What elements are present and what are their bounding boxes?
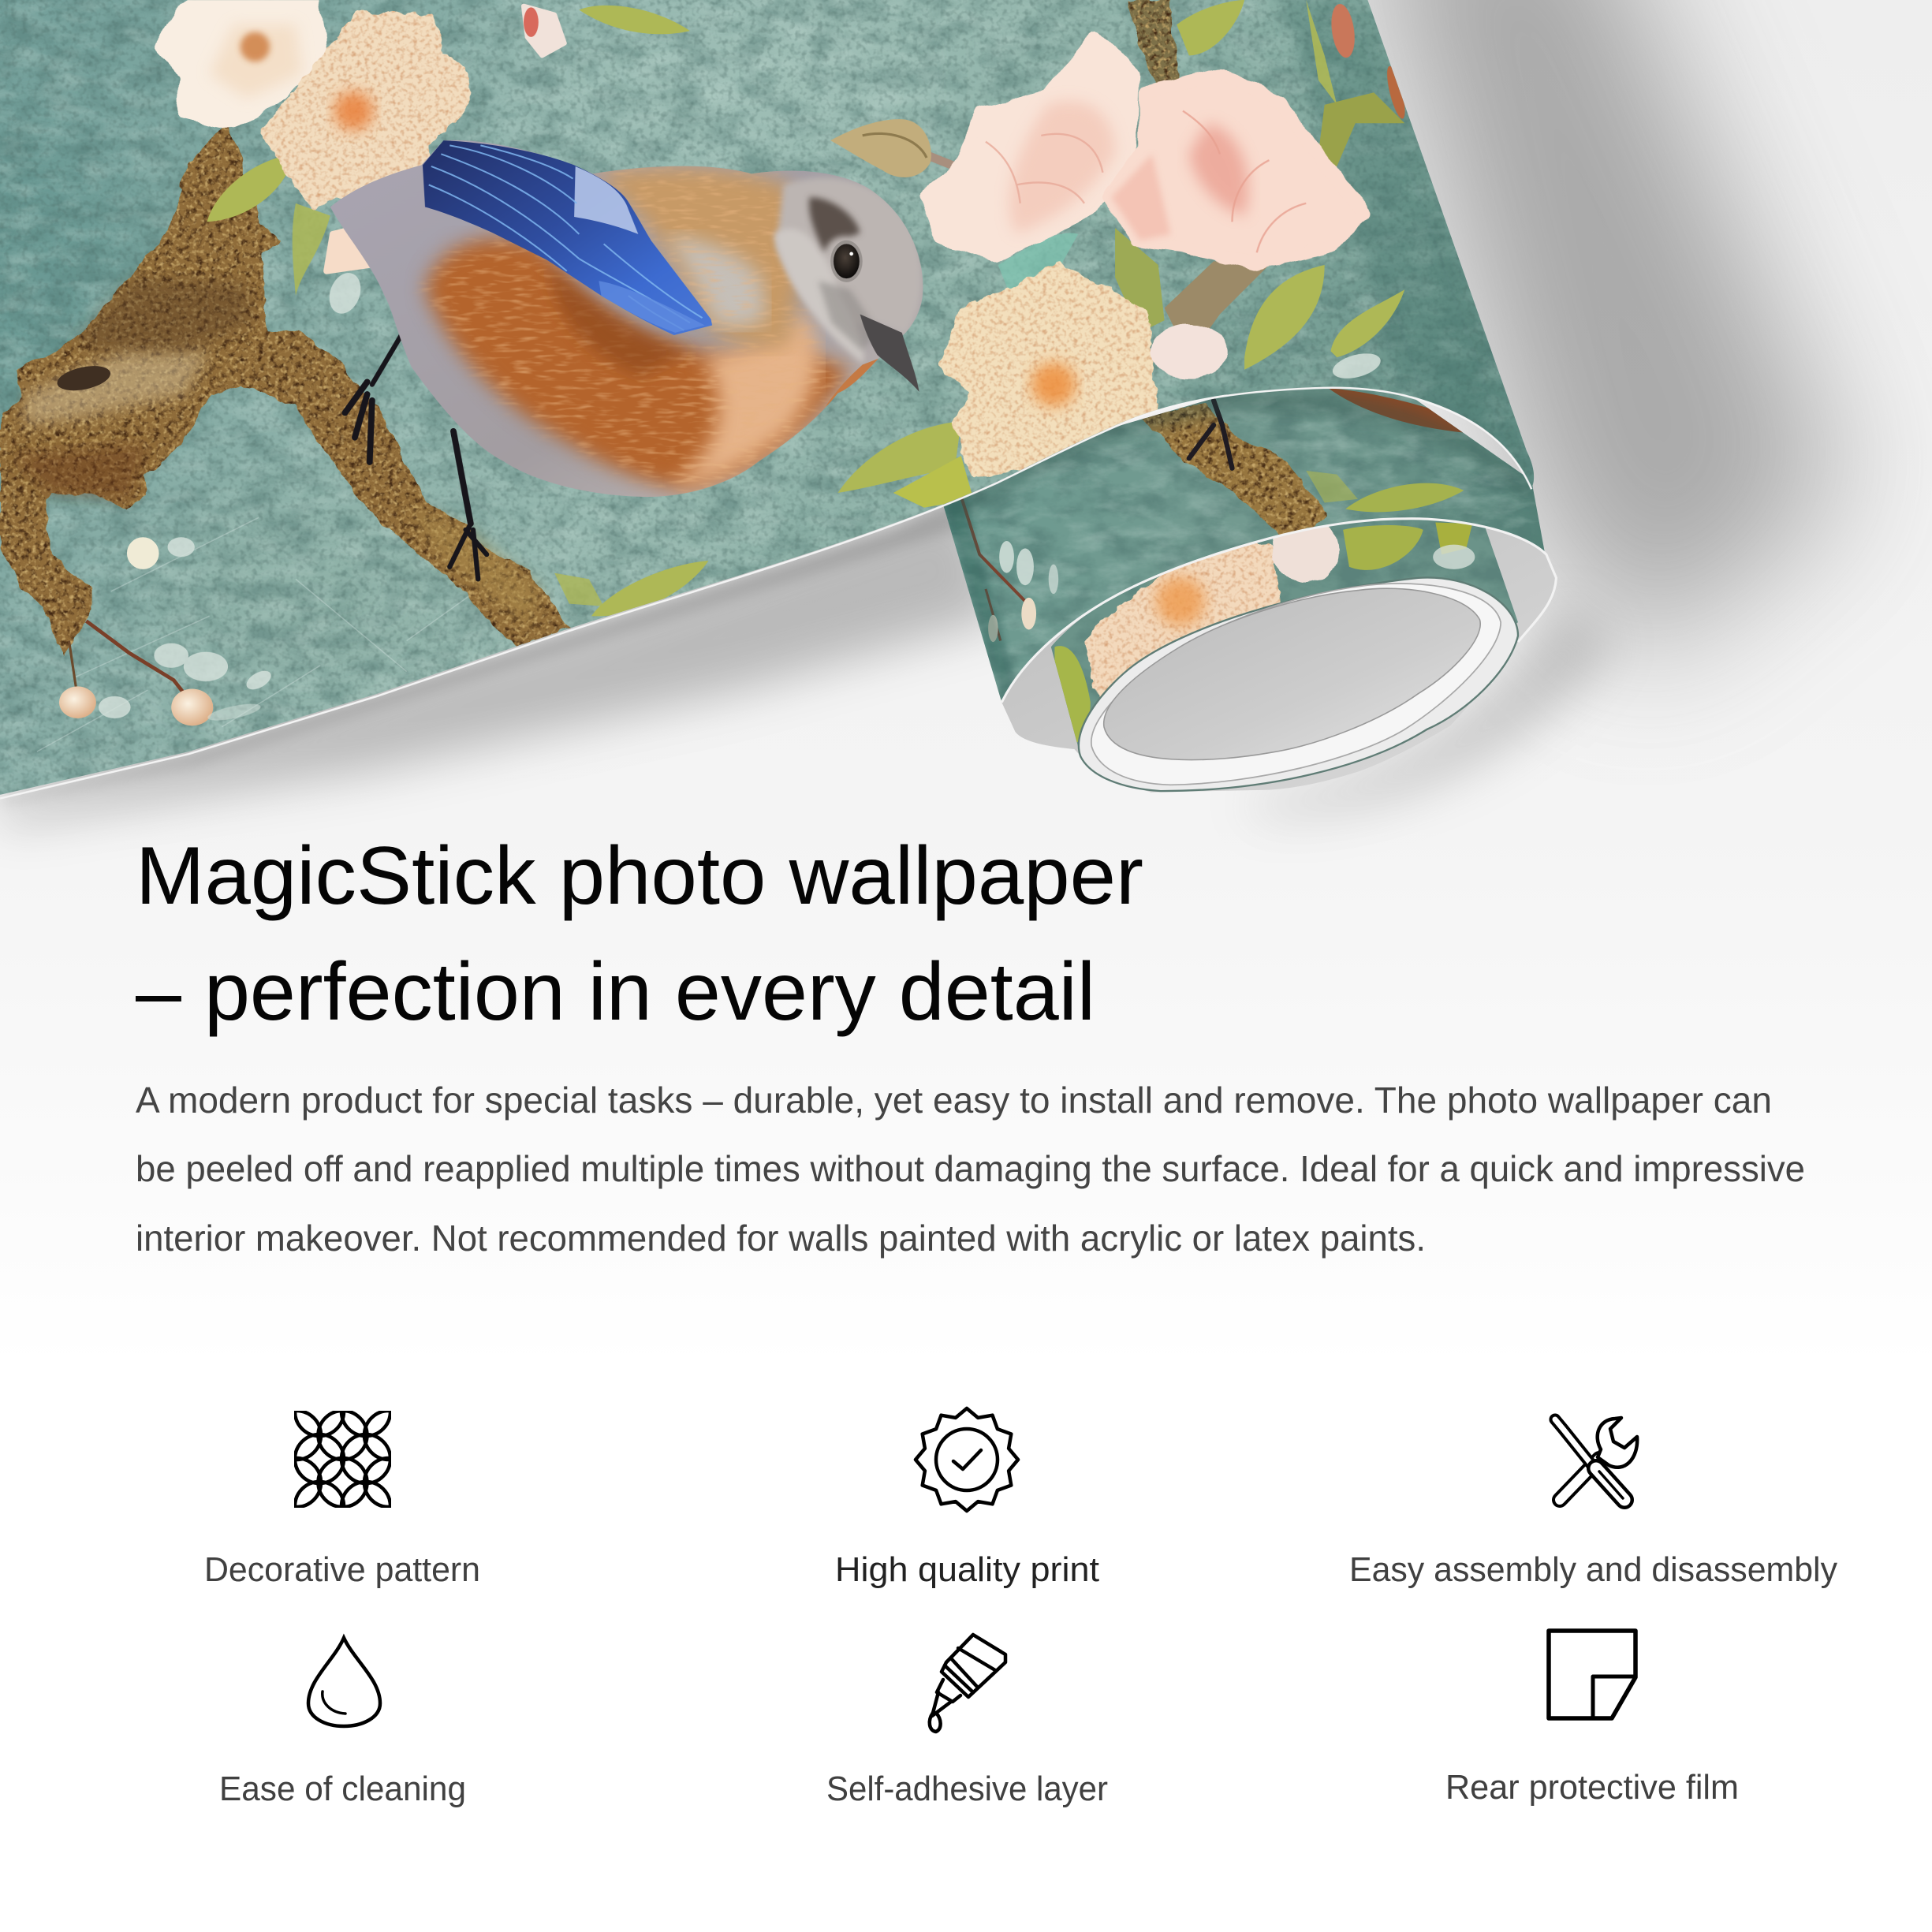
wing: lower feather — [599, 281, 705, 333]
roll: twig with pale buds — [961, 497, 1058, 642]
scratches on the texture — [37, 370, 1010, 752]
pale oval petal — [1330, 349, 1383, 383]
wallpaper sheet with printed artwork — [0, 0, 1553, 813]
roll: small leaf — [1306, 471, 1358, 503]
golden lower branch highlight — [407, 505, 543, 628]
wall shadows cast by the wallpaper — [0, 0, 1848, 823]
flower: white blossom top left — [160, 0, 323, 125]
twig with buds — [59, 537, 213, 725]
bird: blue wing — [423, 140, 712, 335]
bird: eye — [830, 241, 863, 282]
panel: wallpaper roll illustration — [0, 0, 1848, 823]
shade beneath the flap — [942, 388, 1531, 524]
roll: edge of the outer layer — [1001, 519, 1556, 703]
label: ease of cleaning: Ease of cleaning — [219, 1770, 466, 1808]
title — [136, 830, 1143, 1038]
leaves around the branch — [207, 0, 1404, 616]
feature: decorative pattern — [204, 1387, 480, 1589]
label: decorative pattern: Decorative pattern — [204, 1550, 480, 1589]
feature: high quality print — [835, 1408, 1099, 1589]
small peach bud — [326, 228, 370, 271]
bird: throat orange — [826, 359, 878, 407]
bird: throat speckle — [819, 281, 877, 351]
roll: bird tail — [1330, 388, 1463, 432]
lower stem — [1165, 261, 1269, 357]
feature: self-adhesive layer — [826, 1635, 1108, 1808]
bird: dark eye stripe — [809, 197, 860, 252]
darker right edge shading — [1281, 0, 1540, 493]
bird: beak — [860, 314, 919, 392]
strip: leaves — [1343, 525, 1423, 570]
roll: hollow centre — [1104, 588, 1480, 760]
label: easy assembly: Easy assembly and disassembly — [1349, 1550, 1837, 1589]
strip: pale bud — [1271, 517, 1338, 584]
tree branch — [0, 123, 569, 657]
petal lines — [986, 134, 1102, 203]
dark left edge of the roll — [942, 493, 1016, 703]
icon: water drop — [308, 1638, 380, 1726]
wing: feather stripes — [429, 145, 703, 330]
bird legs and feet — [345, 324, 487, 579]
petal lines — [1183, 111, 1306, 252]
label: high quality print: High quality print — [835, 1550, 1099, 1589]
roll: bird claw — [1189, 401, 1232, 468]
strip: left leaf — [1054, 646, 1091, 743]
roll: branch — [1142, 403, 1328, 536]
strip: flower centre — [1156, 576, 1205, 626]
feature: easy assembly — [1349, 1418, 1837, 1589]
upper right stem — [1128, 0, 1185, 92]
gold bud with stem — [830, 119, 986, 179]
roll: leaves — [1345, 483, 1464, 512]
icon: decorative pattern — [272, 1387, 413, 1531]
bird: orange breast — [425, 238, 850, 490]
sheet edge highlight — [0, 388, 1531, 798]
strip: pale ovals — [1433, 545, 1475, 569]
pale bark patch — [24, 351, 210, 425]
small red and white bud — [524, 6, 565, 55]
deep pink centre — [1189, 123, 1248, 215]
title: – perfection in every detail — [136, 946, 1095, 1038]
description text block: interior makeover. Not recommended for walls painted with acrylic or latex paints. — [136, 1218, 1426, 1259]
icon: wrench and screwdriver — [1555, 1418, 1637, 1500]
bud accent — [524, 7, 539, 37]
feature: ease of cleaning — [219, 1638, 466, 1808]
bird: tan back — [593, 166, 807, 347]
bird: cheek — [774, 229, 864, 364]
panel: photo background — [0, 0, 1932, 1364]
bird: pale peach chest — [672, 308, 818, 487]
strip: flower — [1088, 548, 1275, 703]
roll: inner paper layers — [1079, 577, 1518, 791]
darker and lighter washes — [0, 0, 900, 690]
label: rear protective film: Rear protective film — [1445, 1768, 1739, 1807]
strip: leaf right — [1435, 522, 1472, 554]
label: self-adhesive layer: Self-adhesive layer — [826, 1770, 1108, 1808]
icon: peeled film — [1549, 1631, 1635, 1718]
flower: pink blossom right — [1109, 74, 1365, 265]
flower: cream blossom — [945, 267, 1156, 473]
icon: glue bottle — [930, 1635, 1005, 1732]
icon: quality badge — [916, 1408, 1018, 1511]
flower: pink blossom left — [927, 37, 1134, 256]
description text block — [136, 1080, 1805, 1259]
bird: grey wing shoulder — [666, 234, 766, 327]
feature: rear protective film — [1445, 1631, 1739, 1807]
description text block: be peeled off and reapplied multiple times without damaging the surface. Ideal for a quick and impressive — [136, 1148, 1805, 1189]
pink petal shading — [1009, 101, 1115, 234]
right edge pods — [1328, 2, 1408, 120]
title: MagicStick photo wallpaper — [136, 830, 1143, 922]
roll: outer teal body — [943, 386, 1545, 700]
teal background wash behind flowers — [998, 233, 1078, 296]
description text block: A modern product for special tasks – durable, yet easy to install and remove. The photo wallpaper can — [136, 1080, 1772, 1121]
bird: head — [776, 177, 922, 335]
small pale bud — [1151, 324, 1227, 379]
roll: inner strip with printed flower — [1035, 505, 1528, 789]
pink left petal — [1111, 154, 1170, 241]
dark bark band on the trunk — [74, 278, 252, 351]
reddish bark shade — [13, 443, 148, 499]
roll: grey inner end of the outer layer — [1001, 519, 1556, 793]
wing: white-blue patch — [574, 166, 638, 234]
branch knot — [55, 362, 113, 395]
flower: peach blossom — [265, 16, 466, 206]
bird: dark rust under the wing — [548, 265, 690, 376]
pale oval petals — [99, 269, 366, 724]
bird — [320, 129, 937, 505]
